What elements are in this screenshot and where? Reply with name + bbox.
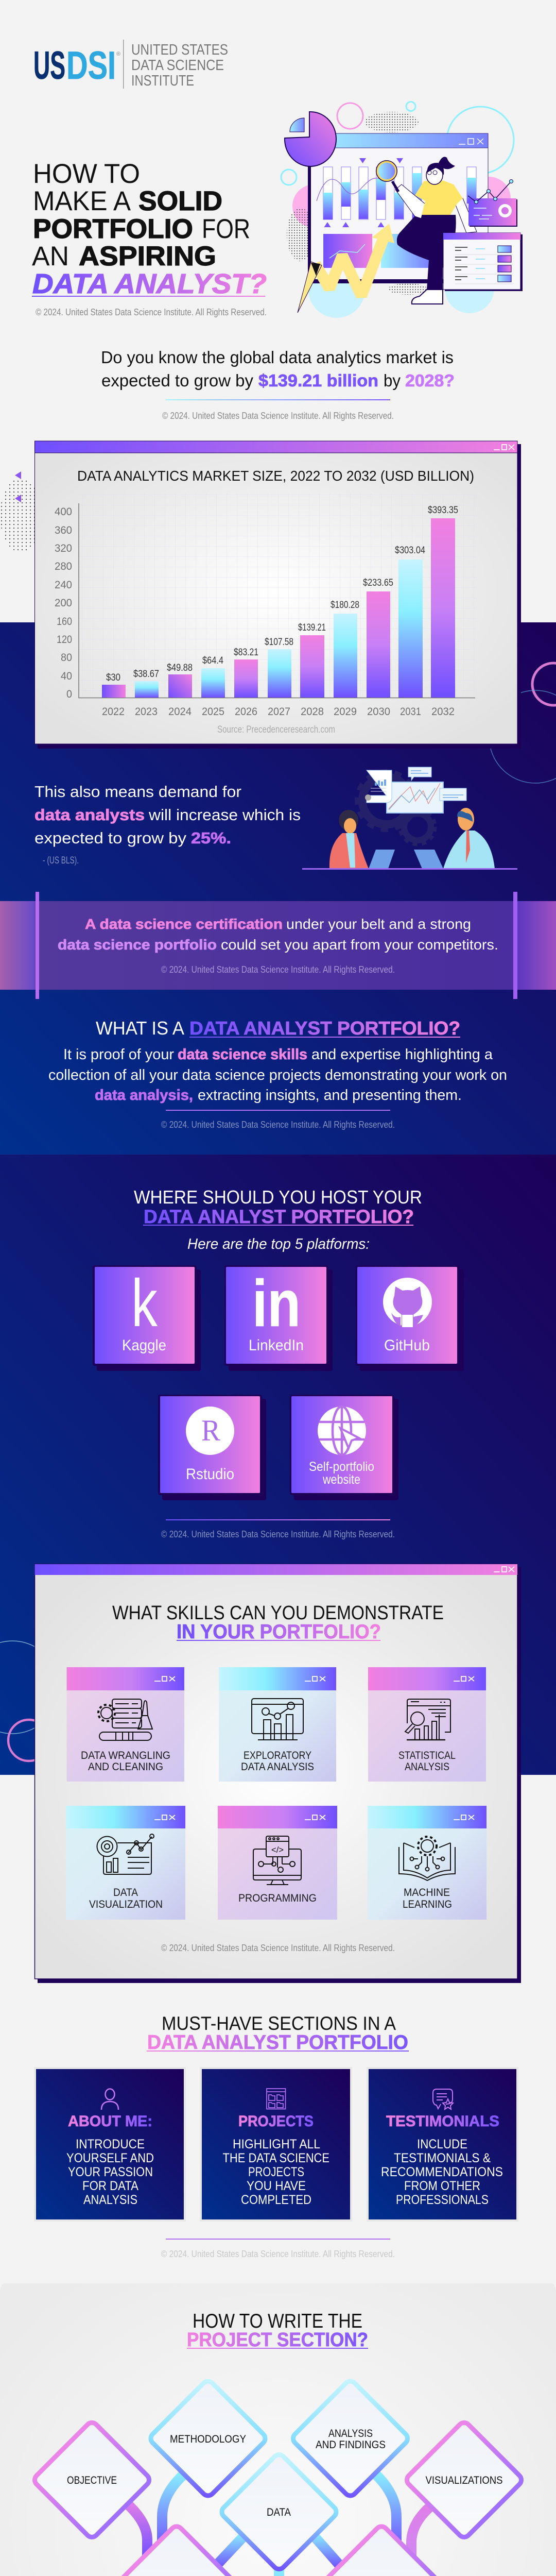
hero title: AN <box>32 241 69 272</box>
card: Self-portfolio website <box>290 1395 398 1500</box>
card: testimonials <box>367 2067 518 2222</box>
callout banner: certification and portfolio: data science portfolio <box>58 937 217 953</box>
heading: must-have sections: DATA ANALYST PORTFOLIO <box>147 2031 408 2054</box>
logo: INSTITUTE <box>131 73 194 89</box>
card: testimonials: PROFESSIONALS <box>396 2193 489 2207</box>
card: Kaggle: k <box>131 1265 158 1341</box>
bar chart: 2025 <box>202 706 224 718</box>
yellow growth arrow <box>298 224 394 313</box>
card: projects: PROJECTS <box>238 2113 314 2130</box>
dark background band: platforms and skills <box>0 1155 556 1775</box>
card: projects: THE DATA SCIENCE <box>222 2151 329 2165</box>
diamond: methodology <box>148 2379 268 2498</box>
market growth question: Do you know the global data analytics market is <box>101 348 454 367</box>
analyst demand text: will increase which is <box>148 806 301 824</box>
panel: market size chart window <box>35 441 521 749</box>
analyst demand text: - (US BLS). <box>43 855 79 866</box>
bar chart: 2032 <box>431 706 455 718</box>
skill card: programming <box>218 1806 337 1920</box>
heading: where to host: DATA ANALYST PORTFOLIO? <box>144 1206 414 1227</box>
copyright: © 2024. United States Data Science Institute. All Rights Reserved. <box>162 411 394 421</box>
definition paragraph: collection of all your data science projects demonstrating your work on <box>48 1067 507 1083</box>
bar chart: 2024 <box>168 706 192 718</box>
skill card: programming: </> <box>271 1845 284 1855</box>
bar chart: 200 <box>55 597 72 609</box>
bar chart: 80 <box>61 652 72 664</box>
bar chart: $38.67 <box>133 669 159 680</box>
skill card: data wrangling: DATA WRANGLING <box>81 1750 170 1761</box>
heading: how to write project section <box>187 2310 368 2351</box>
diamond: analysis and findings: ANALYSIS <box>328 2428 373 2439</box>
bar chart: $107.58 <box>265 637 293 648</box>
analyst demand text: 25%. <box>191 829 231 847</box>
heading: must-have sections <box>147 2013 409 2054</box>
bar chart: 2027 <box>268 706 290 718</box>
hero title: FOR <box>202 214 250 244</box>
hero title: SOLID <box>138 186 222 216</box>
heading: how to write project section: HOW TO WRITE THE <box>193 2310 362 2332</box>
card: testimonials: INCLUDE <box>417 2137 467 2151</box>
bar chart: 2029 <box>334 706 357 718</box>
skill card: data wrangling: AND CLEANING <box>88 1761 163 1773</box>
hero illustration: analyst with dashboards <box>281 102 523 318</box>
bar chart: $393.35 <box>428 505 458 516</box>
bar chart: $233.65 <box>363 578 393 588</box>
callout banner: certification and portfolio: © 2024. United States Data Science Institute. All Rights Reserved. <box>161 964 395 975</box>
logo: US <box>33 44 65 88</box>
heading: where to host <box>134 1187 422 1252</box>
icon: book with gear <box>399 1837 455 1880</box>
dashboard bars <box>317 158 476 268</box>
bar chart: 320 <box>55 543 72 554</box>
heading: where to host: Here are the top 5 platforms: <box>187 1236 370 1252</box>
bar chart: 360 <box>55 524 72 536</box>
chart title: DATA ANALYTICS MARKET SIZE, 2022 TO 2032 (USD BILLION) <box>77 468 474 484</box>
card: about me: ANALYSIS <box>83 2193 137 2207</box>
bar chart: 2026 <box>235 706 257 718</box>
decoration: rings right of chart <box>489 663 556 783</box>
dark background band: market and portfolio definition <box>0 622 556 1155</box>
hero copyright: © 2024. United States Data Science Institute. All Rights Reserved. <box>36 307 267 317</box>
market growth question: by <box>384 371 401 390</box>
heading: where to host: WHERE SHOULD YOU HOST YOUR <box>134 1187 422 1208</box>
icon: database and broom <box>98 1699 152 1740</box>
desk line <box>302 868 517 870</box>
card: testimonials: TESTIMONIALS <box>386 2113 499 2130</box>
woman with laptop <box>329 810 395 869</box>
card: testimonials: FROM OTHER <box>404 2179 480 2193</box>
diamond: objective: OBJECTIVE <box>67 2475 117 2486</box>
heading: what is a data analyst portfolio: WHAT IS A <box>96 1018 184 1039</box>
bar chart: $49.88 <box>167 663 193 673</box>
skill card: data wrangling <box>67 1667 184 1782</box>
skill card: data visualization: DATA <box>113 1887 138 1899</box>
callout banner: certification and portfolio: could set you apart from your competitors. <box>221 937 498 953</box>
diamond: data: DATA <box>267 2506 291 2518</box>
card: LinkedIn: LinkedIn <box>249 1337 304 1354</box>
diamond: background <box>117 2524 236 2576</box>
definition paragraph: extracting insights, and presenting them. <box>198 1087 462 1104</box>
hero title: ASPIRING <box>79 241 216 272</box>
heading: must-have sections: MUST-HAVE SECTIONS IN A <box>162 2013 396 2034</box>
bar chart <box>55 494 475 718</box>
skill card: machine learning <box>368 1806 486 1920</box>
bar chart: 120 <box>57 634 72 646</box>
card: testimonials: RECOMMENDATIONS <box>381 2165 503 2179</box>
card: projects: PROJECTS <box>248 2165 304 2179</box>
card: LinkedIn <box>224 1265 333 1371</box>
illustration: two analysts with laptops <box>302 767 517 870</box>
icon: eye and dashboard <box>97 1834 154 1874</box>
card: projects: COMPLETED <box>241 2193 311 2207</box>
logo: ® <box>116 51 120 57</box>
copyright: © 2024. United States Data Science Institute. All Rights Reserved. <box>161 1120 395 1130</box>
diamond: objective <box>32 2420 151 2539</box>
skill card: exploratory data analysis: EXPLORATORY <box>244 1750 311 1761</box>
logo: DATA SCIENCE <box>131 57 224 74</box>
skill card: exploratory data analysis: DATA ANALYSIS <box>241 1761 314 1773</box>
logo: UNITED STATES <box>131 42 228 58</box>
card: about me: FOR DATA <box>82 2179 138 2193</box>
icon: folders window <box>267 2089 285 2109</box>
skill card: statistical analysis: STATISTICAL <box>398 1750 456 1761</box>
hero title: PORTFOLIO <box>33 214 193 244</box>
bar chart: 400 <box>55 506 72 518</box>
man with laptop <box>414 808 495 869</box>
card: GitHub: GitHub <box>384 1337 430 1354</box>
side panel with donut <box>468 179 517 227</box>
icon: monitor with chart <box>252 1699 303 1740</box>
bar chart: 2028 <box>301 706 324 718</box>
analyst figure <box>376 157 477 304</box>
copyright: © 2024. United States Data Science Institute. All Rights Reserved. <box>161 1943 395 1953</box>
bar chart: $30 <box>106 672 120 683</box>
hero title: HOW TO <box>33 159 140 189</box>
analyst demand text: This also means demand for <box>34 783 241 801</box>
market growth question <box>101 348 455 390</box>
analyst demand text <box>34 783 301 866</box>
skill card: data visualization <box>66 1806 185 1920</box>
card: LinkedIn: in <box>252 1267 301 1341</box>
decoration: dots and triangles left of chart <box>0 471 41 552</box>
market growth question: expected to grow by <box>101 371 253 390</box>
analyst demand text: data analysts <box>34 806 145 824</box>
skill card: programming: PROGRAMMING <box>238 1892 317 1904</box>
bar chart: 280 <box>55 561 72 572</box>
chart source: Source: Precedenceresearch.com <box>217 724 335 735</box>
heading: how to write project section: PROJECT SECTION? <box>187 2329 368 2351</box>
decoration: rings left of skills window <box>0 1641 59 1761</box>
card: about me <box>34 2067 186 2222</box>
card: Kaggle: Kaggle <box>122 1337 166 1354</box>
callout banner: certification and portfolio: A data science certification <box>85 916 283 932</box>
bar chart: 40 <box>61 670 72 682</box>
definition paragraph: data science skills <box>178 1046 307 1063</box>
definition paragraph: data analysis, <box>95 1087 193 1104</box>
bar chart: $64.4 <box>202 655 223 666</box>
bar chart: 2031 <box>400 706 421 718</box>
card: about me: YOUR PASSION <box>68 2165 153 2179</box>
bar chart: 0 <box>66 688 72 700</box>
card: GitHub <box>356 1265 464 1371</box>
bar chart: $83.21 <box>234 647 258 658</box>
card: Rstudio: Rstudio <box>186 1466 234 1483</box>
small data window <box>443 233 523 291</box>
panel: skills window <box>35 1564 521 1983</box>
card: projects: YOU HAVE <box>247 2179 306 2193</box>
skill card: machine learning: MACHINE <box>404 1887 450 1899</box>
card: Self-portfolio website: Self-portfolio <box>309 1460 374 1474</box>
bar chart: $139.21 <box>298 622 326 633</box>
icon: window with magnifier <box>405 1699 450 1740</box>
line chart sheet <box>365 767 466 813</box>
diamond: conclusion <box>322 2524 441 2576</box>
card: projects: HIGHLIGHT ALL <box>233 2137 320 2151</box>
skills heading <box>112 1602 444 1643</box>
bar chart: 2022 <box>102 706 125 718</box>
bar chart: $180.28 <box>331 600 359 611</box>
diamond: methodology: METHODOLOGY <box>170 2433 246 2445</box>
card: Kaggle <box>93 1265 201 1371</box>
definition paragraph: and expertise highlighting a <box>311 1046 493 1063</box>
logo: DSI <box>66 44 116 88</box>
skills heading: IN YOUR PORTFOLIO? <box>177 1621 381 1643</box>
hero title <box>32 159 267 299</box>
bar chart: 240 <box>55 579 72 591</box>
tree stems <box>126 2473 433 2576</box>
logo <box>33 40 228 89</box>
card: about me: ABOUT ME: <box>68 2113 152 2130</box>
pie chart <box>285 112 336 166</box>
market growth question: 2028? <box>405 371 455 390</box>
icon: person <box>101 2089 118 2110</box>
card: Rstudio <box>158 1395 266 1500</box>
diamond: analysis and findings <box>291 2379 410 2498</box>
definition paragraph: It is proof of your <box>63 1046 174 1063</box>
card: Self-portfolio website: website <box>322 1472 360 1487</box>
bar chart: 2030 <box>367 706 390 718</box>
market growth question: $139.21 billion <box>258 371 378 390</box>
icon: speech bubble with star <box>433 2089 453 2109</box>
diamond: analysis and findings: AND FINDINGS <box>316 2439 386 2451</box>
definition paragraph <box>48 1046 507 1104</box>
bar chart: 2023 <box>135 706 158 718</box>
diamond: visualizations: VISUALIZATIONS <box>425 2475 502 2486</box>
copyright: © 2024. United States Data Science Institute. All Rights Reserved. <box>161 2249 395 2259</box>
diamond: visualizations <box>405 2420 524 2539</box>
light background band: project section <box>0 2283 556 2576</box>
heading: what is a data analyst portfolio: DATA ANALYST PORTFOLIO? <box>189 1018 460 1039</box>
card: about me: YOURSELF AND <box>66 2151 154 2165</box>
bar chart: 160 <box>57 616 72 628</box>
card: testimonials: TESTIMONIALS & <box>394 2151 491 2165</box>
skill card: statistical analysis <box>368 1667 486 1782</box>
skill card: exploratory data analysis <box>219 1667 336 1782</box>
hero title: MAKE A <box>33 186 131 216</box>
card: projects <box>200 2067 352 2222</box>
copyright: © 2024. United States Data Science Institute. All Rights Reserved. <box>161 1529 395 1539</box>
skill card: statistical analysis: ANALYSIS <box>405 1761 449 1773</box>
icon: code on monitor <box>253 1836 301 1885</box>
bar chart: $303.04 <box>395 545 425 556</box>
skill card: data visualization: VISUALIZATION <box>89 1899 163 1910</box>
card: Rstudio: R <box>201 1414 220 1447</box>
skill card: machine learning: LEARNING <box>403 1899 452 1910</box>
callout banner: certification and portfolio: under your belt and a strong <box>286 916 471 932</box>
skills heading: WHAT SKILLS CAN YOU DEMONSTRATE <box>112 1602 444 1624</box>
callout banner: certification and portfolio <box>0 892 556 999</box>
diamond: data <box>219 2452 339 2571</box>
hero title: DATA ANALYST? <box>32 268 267 299</box>
analyst demand text: expected to grow by <box>34 829 187 847</box>
diagram: project section tree <box>32 2379 524 2576</box>
card: about me: INTRODUCE <box>76 2137 145 2151</box>
